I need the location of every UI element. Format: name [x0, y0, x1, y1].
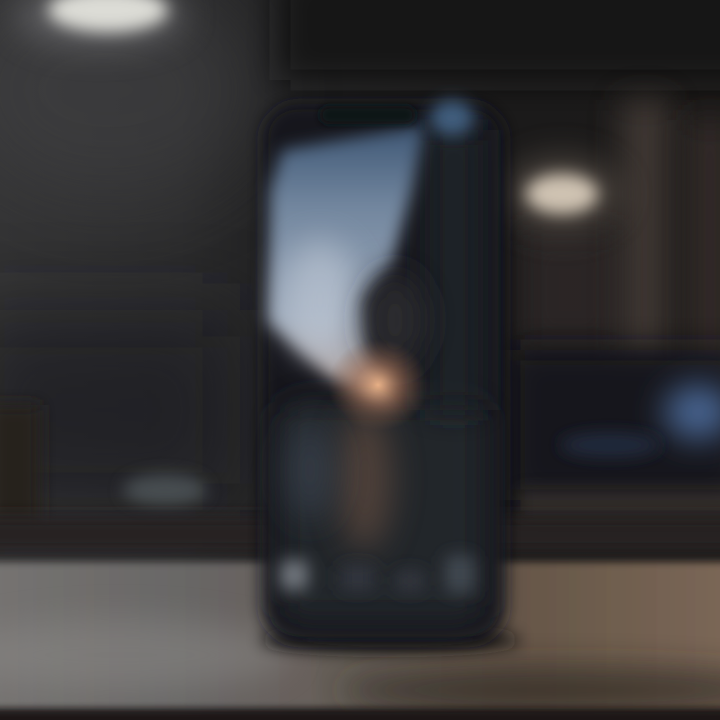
lower left blue tone [286, 420, 334, 520]
smartphone [260, 100, 520, 652]
bottom screen icons [280, 555, 475, 593]
right wall panels [510, 100, 720, 500]
phone body [263, 104, 505, 642]
figure silhouette [365, 272, 425, 368]
phone shadow [260, 628, 520, 652]
warm glow [328, 339, 428, 431]
blue light on the right [560, 384, 720, 457]
screen right dark area [425, 130, 483, 410]
ceiling light top left [15, 0, 185, 48]
notch [320, 106, 415, 124]
screen top highlight [430, 100, 474, 136]
screen sky highlight [282, 240, 358, 360]
background objects on the left [0, 405, 207, 525]
lamp on the right [504, 156, 620, 232]
screen sky [268, 125, 425, 400]
table surface [0, 562, 720, 720]
warm reflection [337, 410, 393, 550]
screen lower dark area [280, 400, 485, 620]
far shelf band [0, 490, 720, 552]
